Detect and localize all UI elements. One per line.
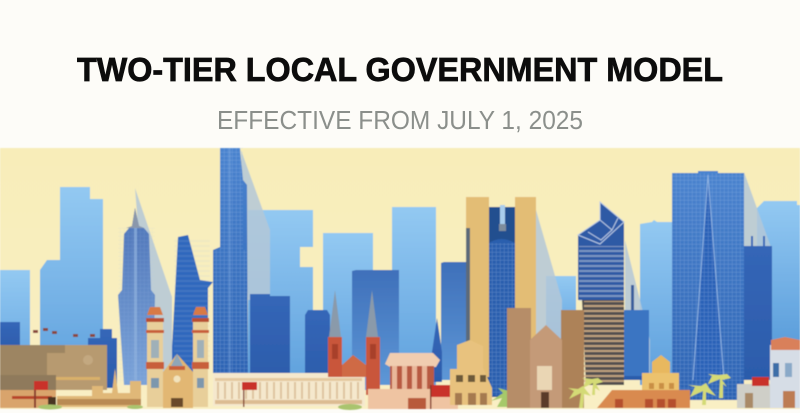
flag right: [752, 377, 769, 386]
tower shadows: [135, 150, 772, 380]
white colonial building: [737, 337, 800, 408]
background light towers: [0, 187, 800, 390]
green shrubs: [38, 404, 362, 410]
patterned tower: [578, 202, 624, 385]
pavilion: [597, 355, 690, 408]
mid blue towers: [352, 262, 467, 385]
dark blue towers: [0, 236, 772, 388]
skyline illustration: [0, 148, 800, 410]
colonial building: [450, 340, 492, 405]
flag on palace: [242, 382, 257, 407]
gold twin tower: [466, 197, 536, 397]
cathedral: [328, 290, 380, 395]
city hall: [48, 368, 141, 407]
small mid tower: [624, 285, 649, 376]
palm tree centre: [491, 388, 522, 407]
title: TWO-TIER LOCAL GOVERNMENT MODEL: [77, 51, 723, 88]
exhibition hall: [0, 345, 107, 408]
tallest tower: [213, 148, 248, 380]
subtitle: EFFECTIVE FROM JULY 1, 2025: [217, 105, 583, 135]
temple towers: [146, 307, 209, 408]
brown church: [507, 308, 584, 408]
small flags in the air: [33, 328, 95, 337]
flag on hall: [34, 381, 48, 408]
mausoleum: [368, 353, 458, 409]
flag at mausoleum: [430, 385, 453, 409]
sail tower: [172, 235, 213, 375]
white palace: [213, 373, 365, 406]
main blue tower: [672, 171, 744, 400]
spire tower: [118, 208, 155, 385]
palm trees: [568, 374, 731, 408]
sky background: [0, 148, 800, 409]
